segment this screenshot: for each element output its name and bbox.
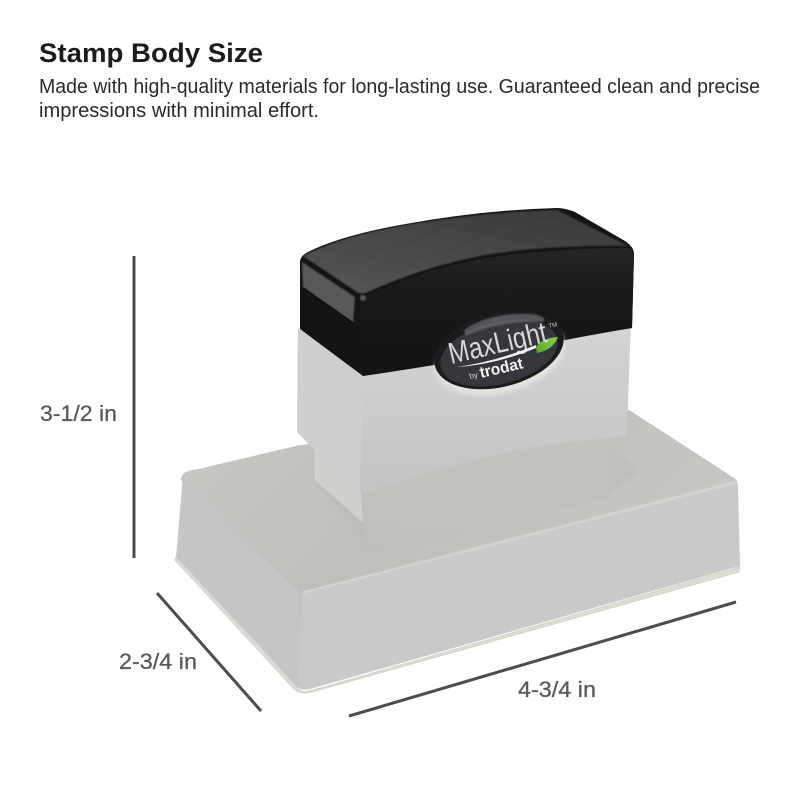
logo wordmark: MaxLight <box>445 316 551 371</box>
width dimension line <box>349 602 736 716</box>
MaxLight logo badge: trodat <box>478 355 525 382</box>
description text <box>39 76 760 122</box>
depth dimension line <box>157 593 261 711</box>
cap side window <box>302 262 355 323</box>
by trodat mark: by <box>468 370 479 381</box>
stamp grey body <box>297 322 631 492</box>
stamp black cap <box>300 208 634 376</box>
height dimension line <box>132 256 136 558</box>
height label: 3-1/2 in <box>40 401 117 426</box>
depth label: 2-3/4 in <box>119 649 197 674</box>
cap front corner highlight <box>360 295 366 301</box>
description text: Made with high-quality materials for long-lasting use. Guaranteed clean and precise <box>39 76 760 98</box>
logo leaf <box>536 337 558 353</box>
cap front face <box>360 248 634 376</box>
title: Stamp Body Size <box>39 38 263 68</box>
stamp base <box>175 410 740 693</box>
stamp neck <box>315 420 640 555</box>
description text: impressions with minimal effort. <box>39 100 319 122</box>
stamp illustration <box>175 208 740 693</box>
width label: 4-3/4 in <box>518 677 596 702</box>
MaxLight logo badge <box>426 298 573 408</box>
trademark mark: TM <box>548 322 558 330</box>
cap top face <box>303 210 628 294</box>
